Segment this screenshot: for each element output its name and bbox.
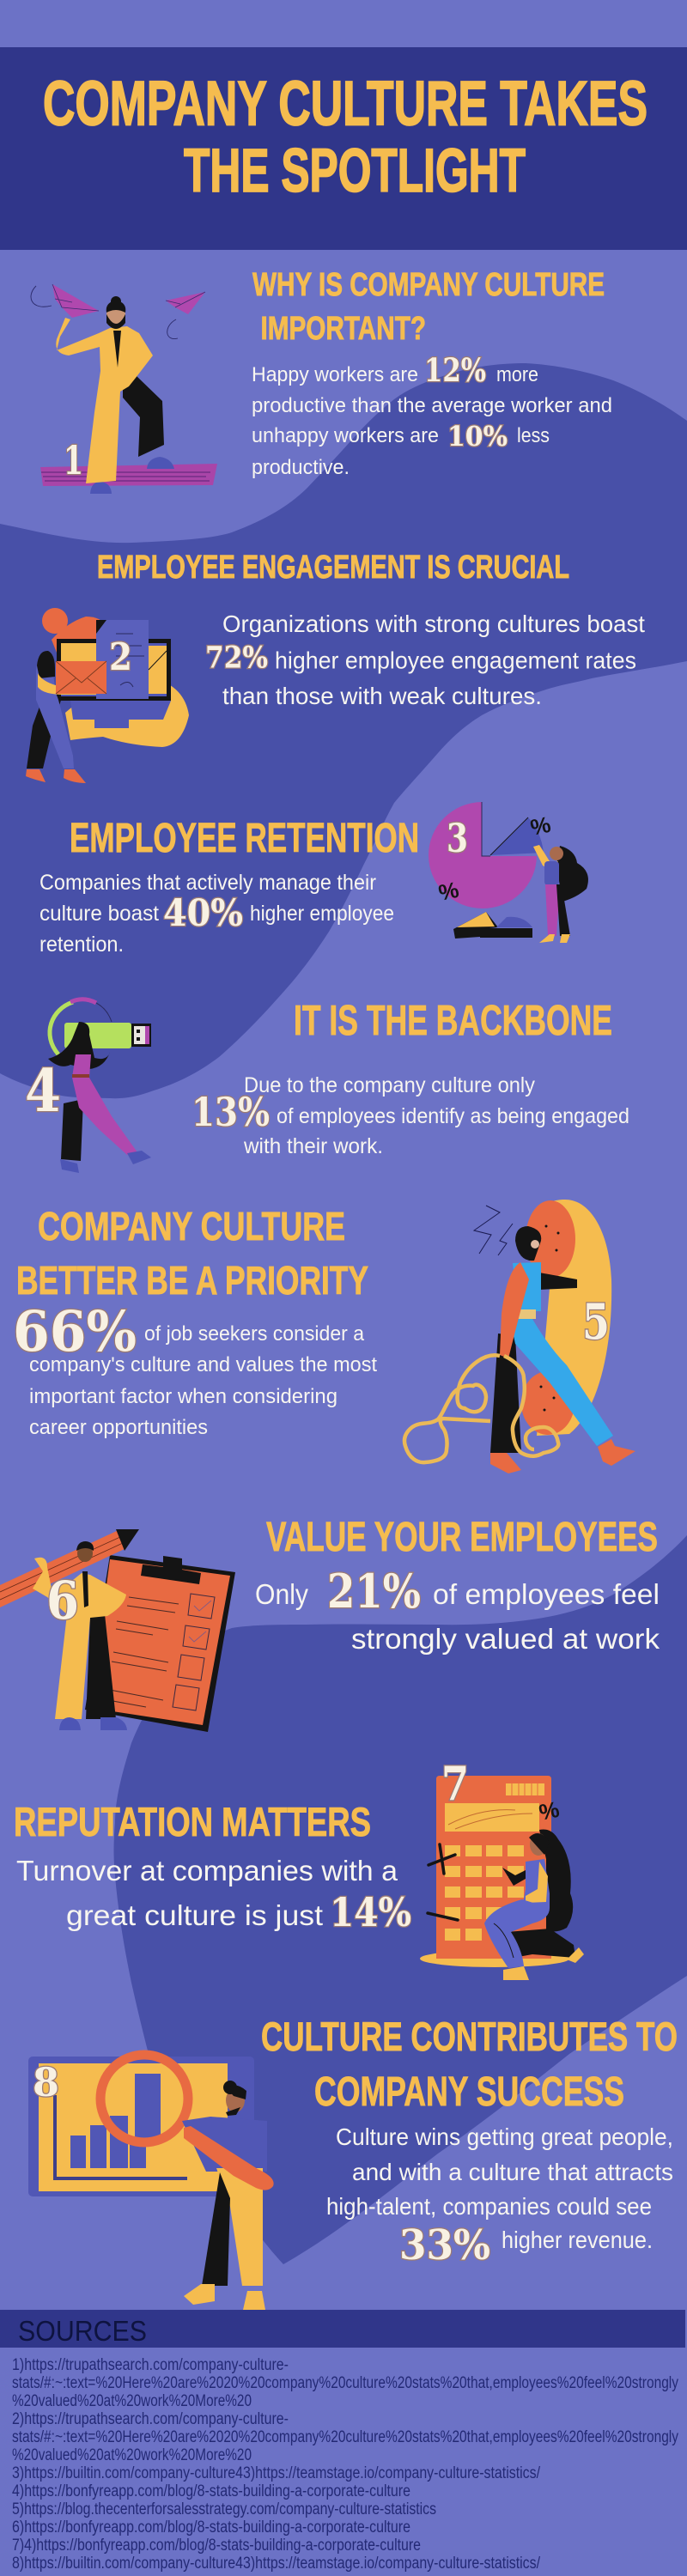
text block: source list: 8)https://builtin.com/company-culture43)https://teamstage.io/company-culture-statistics/: [12, 2555, 541, 2573]
number 8: 8: [33, 2059, 59, 2105]
number 1: 1: [64, 437, 83, 483]
text block: backbone stat: with their work.: [243, 1134, 383, 1158]
text block: source list: 6)https://bonfyreapp.com/blog/8-stats-building-a-corporate-culture: [12, 2518, 410, 2537]
heading: reputation matters: REPUTATION MATTERS: [14, 1799, 371, 1844]
number 7: 7: [441, 1756, 469, 1811]
text block: valued stat: Only: [255, 1578, 308, 1610]
text block: revenue stat: higher revenue.: [502, 2227, 653, 2253]
number 5: 5: [582, 1293, 610, 1351]
icon: telephone cord: [404, 1355, 558, 1462]
icon: percent signs: %: [436, 877, 461, 906]
text block: engagement stat: [205, 611, 645, 709]
panel: section 3 employee retention: [40, 802, 588, 957]
text block: retention stat: Companies that actively manage their: [40, 871, 376, 895]
text block: backbone stat: 13%: [192, 1089, 270, 1135]
text block: revenue stat: Culture wins getting great people,: [336, 2123, 673, 2150]
icon: woman carrying USB drive: [25, 999, 151, 1173]
text block: job seekers stat: career opportunities: [29, 1416, 208, 1439]
panel: section 4 it is the backbone: [25, 998, 629, 1173]
text block: retention stat: culture boast: [40, 902, 159, 926]
text block: job seekers stat: important factor when considering: [29, 1385, 337, 1408]
text block: happy workers: less: [517, 424, 550, 447]
text block: job seekers stat: 66%: [13, 1299, 137, 1364]
icon: man with magnifier and bar chart: [28, 2055, 274, 2310]
title banner: [0, 47, 687, 250]
heading: culture contributes: [261, 2014, 678, 2115]
text block: job seekers stat: of job seekers consider a: [144, 1322, 365, 1346]
text block: happy workers: 10%: [447, 420, 508, 453]
heading: why is company culture important: [252, 267, 605, 347]
text block: job seekers stat: company's culture and values the most: [29, 1353, 377, 1376]
icon: percent sign: %: [537, 1796, 562, 1826]
text block: valued stat: 21%: [327, 1564, 421, 1619]
icon: woman at monitor with envelope: [26, 608, 189, 783]
icon: man with clipboard and pencil: [0, 1529, 235, 1732]
text block: valued stat: [255, 1564, 660, 1655]
text block: source list: %20valued%20at%20work%20More%20: [12, 2392, 252, 2410]
text block: source list: 4)https://bonfyreapp.com/blog/8-stats-building-a-corporate-culture: [12, 2482, 410, 2500]
text block: backbone stat: Due to the company culture only: [244, 1073, 535, 1097]
text block: retention stat: higher employee: [250, 902, 394, 926]
icon: percent signs: %: [528, 811, 553, 841]
number 4: 4: [25, 1057, 61, 1126]
number 6: 6: [46, 1571, 79, 1631]
text block: revenue stat: [326, 2123, 673, 2269]
text block: revenue stat: and with a culture that attracts: [352, 2159, 673, 2185]
background wave: upper dark shape: [0, 363, 687, 1098]
text block: happy workers: productive than the average worker and: [252, 394, 612, 417]
text block: retention stat: retention.: [40, 933, 124, 957]
text block: source list: 1)https://trupathsearch.com/company-culture-: [12, 2356, 289, 2374]
text block: happy workers: 12%: [424, 351, 486, 389]
text block: source list: 5)https://blog.thecenterforsalesstrategy.com/company-culture-statistics: [12, 2500, 436, 2518]
heading: why is company culture important: IMPORTANT?: [261, 311, 426, 347]
heading: better be a priority: BETTER BE A PRIORITY: [16, 1258, 368, 1303]
text block: engagement stat: higher employee engagement rates: [275, 647, 636, 673]
sources banner: [0, 2310, 685, 2348]
icon: woman with pie chart: [429, 802, 588, 943]
panel: section 5 better be a priority: [13, 1200, 635, 1473]
text block: backbone stat: [192, 1073, 629, 1158]
panel: section 8 culture contributes to success: [28, 2014, 678, 2310]
title: THE SPOTLIGHT: [184, 137, 526, 205]
title: [43, 69, 647, 205]
icon: woman with calculator: [420, 1756, 584, 1980]
number 3: 3: [447, 815, 468, 861]
text block: retention stat: [40, 871, 394, 957]
text block: turnover stat: Turnover at companies with a: [16, 1855, 398, 1886]
text block: source list: [12, 2356, 678, 2573]
panel: section 6 value your employees: [0, 1515, 660, 1732]
panel: section 7 reputation matters: [14, 1756, 584, 1980]
panel: section 2 employee engagement: [26, 550, 645, 783]
background wave: lower dark shape: [113, 1535, 687, 2264]
number 2: 2: [109, 635, 132, 679]
text block: turnover stat: 14%: [330, 1889, 411, 1935]
text block: engagement stat: Organizations with strong cultures boast: [222, 611, 645, 637]
text block: revenue stat: high-talent, companies could see: [326, 2193, 652, 2220]
text block: source list: 3)https://builtin.com/company-culture43)https://teamstage.io/company-culture-statistics/: [12, 2464, 541, 2482]
text block: engagement stat: than those with weak cultures.: [222, 683, 542, 709]
text block: source list: 7)4)https://bonfyreapp.com/blog/8-stats-building-a-corporate-culture: [12, 2537, 421, 2555]
text block: valued stat: of employees feel: [433, 1578, 660, 1610]
text block: revenue stat: 33%: [399, 2221, 490, 2269]
panel: section 1 why culture is important: [31, 267, 612, 494]
text block: valued stat: strongly valued at work: [351, 1623, 660, 1655]
text block: happy workers: more: [496, 363, 538, 386]
text block: turnover stat: great culture is just: [66, 1899, 323, 1931]
text block: turnover stat: [16, 1855, 411, 1935]
sources heading: SOURCES: [18, 2315, 147, 2347]
text block: job seekers stat: [13, 1299, 377, 1439]
icon: man with paper planes: [31, 284, 217, 494]
text block: happy workers: [252, 351, 612, 479]
heading: better be a priority: [16, 1204, 368, 1303]
icon: woman hugging telephone: [404, 1200, 635, 1473]
text block: happy workers: Happy workers are: [252, 363, 418, 386]
text block: backbone stat: of employees identify as being engaged: [277, 1104, 629, 1128]
text block: source list: %20valued%20at%20work%20More%20: [12, 2446, 252, 2464]
heading: employee retention: EMPLOYEE RETENTION: [70, 816, 419, 861]
text block: retention stat: 40%: [163, 892, 243, 935]
text block: source list: 2)https://trupathsearch.com/company-culture-: [12, 2410, 289, 2428]
heading: better be a priority: COMPANY CULTURE: [38, 1204, 345, 1249]
text block: happy workers: productive.: [252, 456, 350, 479]
text block: engagement stat: 72%: [205, 641, 268, 675]
text block: happy workers: unhappy workers are: [252, 424, 439, 447]
icon: percent signs: [436, 811, 553, 906]
